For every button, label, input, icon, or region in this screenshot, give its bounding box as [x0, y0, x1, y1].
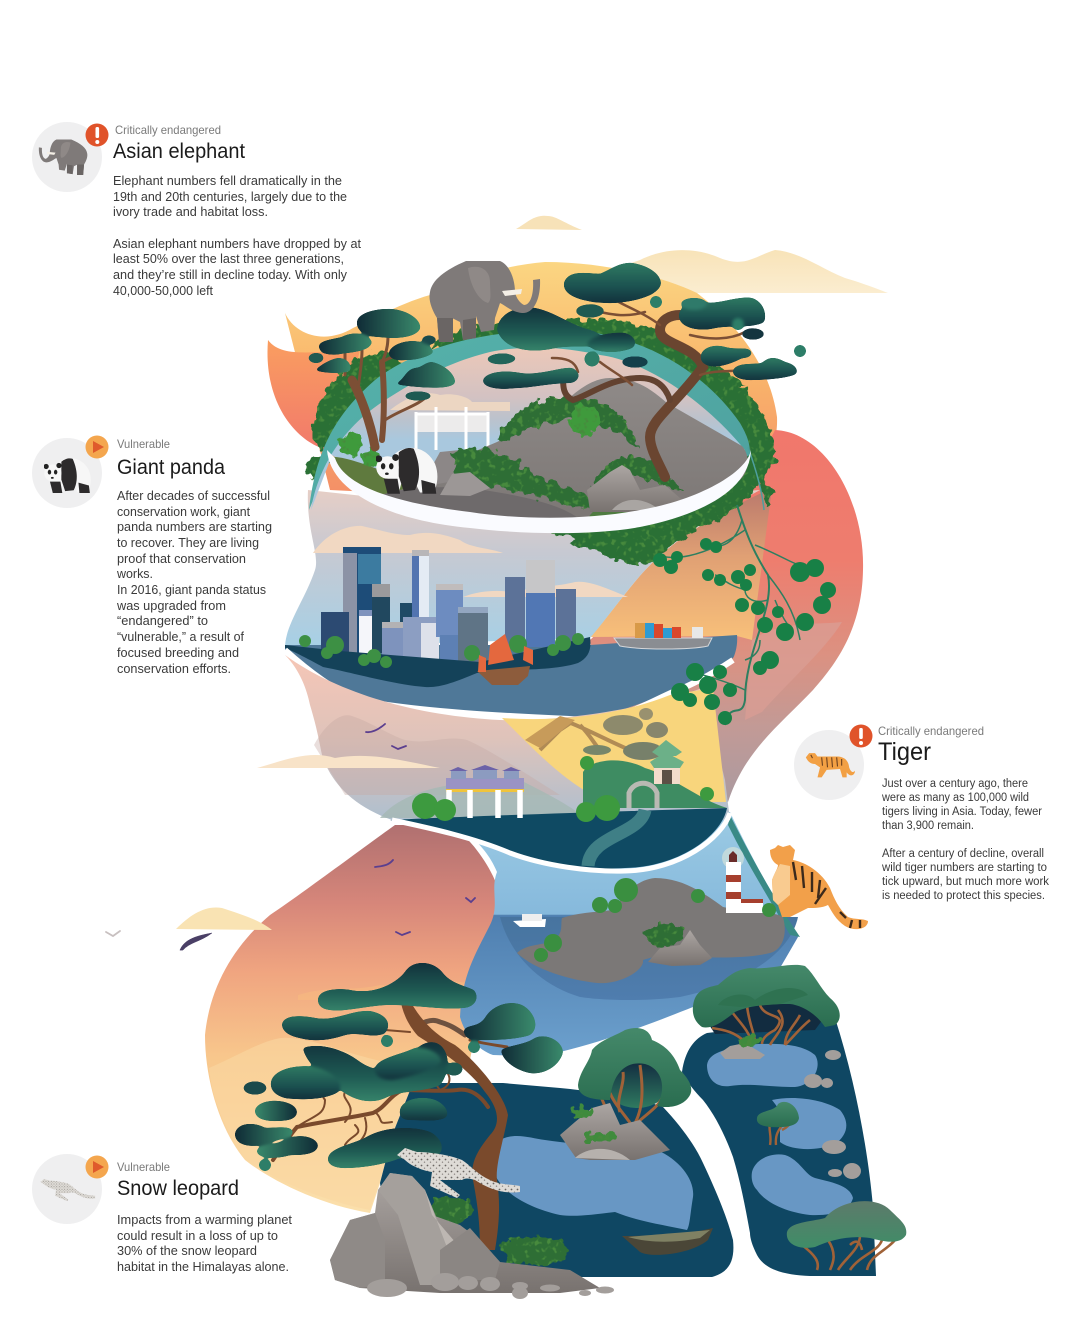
text block: panda numbers are starting [117, 520, 272, 534]
icon: vulnerable badge [86, 436, 108, 458]
little rocks [804, 1050, 861, 1179]
text block: works. [116, 567, 153, 581]
text block: focused breeding and [117, 646, 239, 660]
peach slope [590, 488, 772, 640]
rocks top right lake [720, 1043, 765, 1059]
text block: Impacts from a warming planet [117, 1213, 293, 1227]
teal strip [728, 815, 800, 937]
icon: snow leopard [32, 1154, 102, 1224]
clouds in city sky [313, 526, 503, 553]
dome interior [311, 348, 745, 525]
animal: snow leopard [397, 1148, 520, 1198]
panel: glass dome forest [308, 261, 806, 533]
text block: 19th and 20th centuries, largely due to the [113, 190, 347, 204]
round trees [534, 878, 776, 962]
dark water [390, 808, 727, 868]
text block: In 2016, giant panda status [117, 583, 266, 597]
mangrove top right [693, 965, 840, 1045]
small trees [299, 633, 584, 668]
text block: than 3,900 remain. [882, 820, 974, 832]
text block: to recover. They are living [117, 536, 259, 550]
heading: Snow leopard [117, 1177, 239, 1200]
text block: habitat in the Himalayas alone. [117, 1260, 289, 1274]
lakes [492, 1044, 853, 1230]
text block: After decades of successful [117, 489, 270, 503]
text block [881, 778, 1049, 902]
text block: and they’re still in decline today. With only [113, 268, 348, 282]
text block: least 50% over the last three generations, [113, 252, 344, 266]
pine trunk [400, 997, 508, 1250]
orange sky [285, 262, 777, 510]
coral flame [267, 340, 360, 450]
mountain [372, 378, 748, 519]
background clouds top [516, 216, 888, 293]
heading: Giant panda [117, 456, 225, 479]
icon: tiger [794, 730, 864, 800]
shrubs on mountain [453, 396, 686, 510]
text block: conservation work, giant [117, 505, 251, 519]
text block [116, 489, 272, 676]
text block: tick upward, but much more work [882, 876, 1049, 888]
junk boat [477, 634, 533, 685]
icon: panda [32, 438, 102, 508]
text block: Asian elephant numbers have dropped by at [113, 237, 362, 251]
dome rim [309, 330, 750, 525]
text block: Just over a century ago, there [882, 778, 1028, 790]
city sky [285, 490, 760, 648]
animal: elephant [429, 261, 540, 342]
tree canopy pads [308, 263, 806, 400]
round trees [412, 756, 714, 822]
palace gate [446, 765, 524, 818]
container ship [614, 623, 712, 649]
text block: is needed to protect this species. [882, 890, 1045, 902]
text block: were as many as 100,000 wild [881, 792, 1029, 804]
birds [106, 724, 475, 950]
foreground pine and rocks [235, 963, 614, 1299]
mangrove trees [560, 965, 906, 1270]
pine pads [235, 963, 563, 1171]
text block: Elephant numbers fell dramatically in the [113, 174, 342, 188]
clouds [176, 907, 272, 930]
text block: 40,000-50,000 left [113, 284, 214, 298]
grey rocks [440, 465, 688, 512]
icon: critical badge [850, 724, 872, 748]
misty mountains [314, 715, 560, 795]
white divider chin [392, 813, 730, 871]
panel: Giant panda info [32, 436, 272, 676]
text block: “vulnerable,” a result of [117, 630, 245, 644]
yellow hillside [502, 688, 726, 802]
low cloud [257, 755, 440, 768]
panel: Asian elephant info [32, 122, 362, 298]
stone arch [629, 783, 657, 808]
river [588, 810, 645, 866]
text block: ivory trade and habitat loss. [113, 205, 268, 219]
panel: chin valley [257, 655, 730, 871]
panel: city harbour [285, 490, 760, 720]
skyscrapers [321, 547, 576, 662]
text block: proof that conservation [117, 552, 246, 566]
green foothills [380, 780, 585, 818]
pagoda [650, 740, 684, 784]
bright bushes [338, 405, 600, 467]
shrubs [428, 1195, 569, 1265]
small mangrove [757, 1102, 799, 1145]
right grass [585, 502, 690, 525]
distant gate [416, 407, 488, 460]
text block: After a century of decline, overall [882, 848, 1044, 860]
text block: 30% of the snow leopard [117, 1244, 257, 1258]
rocks on island [648, 930, 712, 966]
status: Critically endangered [115, 123, 221, 137]
white divider [285, 650, 733, 720]
text block: could result in a loss of up to [117, 1229, 278, 1243]
panel: Tiger info [794, 724, 1049, 902]
chin background [285, 655, 730, 820]
tree trunks [345, 296, 745, 477]
mangrove bottom right [787, 1201, 906, 1270]
left land [380, 1083, 733, 1277]
sunset backdrop behind dome [267, 262, 863, 802]
icon: critical badge [86, 124, 108, 146]
island [517, 878, 785, 983]
coral circle [590, 430, 863, 802]
mangrove centre [578, 1028, 691, 1127]
animal: tiger [770, 845, 868, 929]
status: Vulnerable [117, 1160, 170, 1174]
pine branches [273, 993, 507, 1160]
text block: tigers living in Asia. Today, fewer [882, 806, 1042, 818]
left grass [330, 457, 420, 497]
text block: conservation efforts. [117, 662, 231, 676]
shrub [644, 924, 684, 946]
text block: was upgraded from [116, 599, 226, 613]
text block: wild tiger numbers are starting to [881, 862, 1047, 874]
status: Critically endangered [878, 724, 984, 738]
icon: vulnerable badge [86, 1156, 108, 1178]
rowing boat [622, 1228, 713, 1255]
ferry [513, 914, 546, 927]
background boulder [430, 450, 470, 485]
dome distant cloud [390, 393, 510, 411]
bowl rim [327, 447, 751, 533]
foreground ground [372, 487, 585, 525]
right land [682, 1018, 876, 1276]
text block [113, 174, 362, 298]
glass line [748, 447, 764, 510]
icon: elephant [32, 122, 102, 192]
heading: Asian elephant [113, 140, 245, 163]
panel: snow leopard sky [176, 825, 500, 1213]
text block: “endangered” to [117, 614, 208, 628]
vine with leaves [653, 505, 836, 725]
rocks centre lake [560, 1103, 670, 1160]
lighthouse [722, 847, 763, 913]
dark shoreline [285, 637, 590, 687]
deep water [500, 917, 798, 1000]
green hill [583, 760, 727, 808]
rock outcrop [330, 1173, 614, 1299]
heading: Tiger [878, 738, 931, 766]
status: Vulnerable [117, 437, 170, 451]
pink hills [745, 622, 842, 720]
shrubs on rocks [570, 1035, 763, 1142]
panel: dark lake land [380, 1018, 876, 1277]
panel: Snow leopard info [32, 1154, 293, 1274]
foliage behind dome [304, 319, 778, 565]
text block [117, 1213, 293, 1274]
faded bonsai [525, 708, 668, 760]
animal: panda [375, 448, 437, 494]
panel: neck sea [460, 812, 800, 1055]
water [285, 635, 737, 718]
sky and sea [460, 812, 798, 1055]
